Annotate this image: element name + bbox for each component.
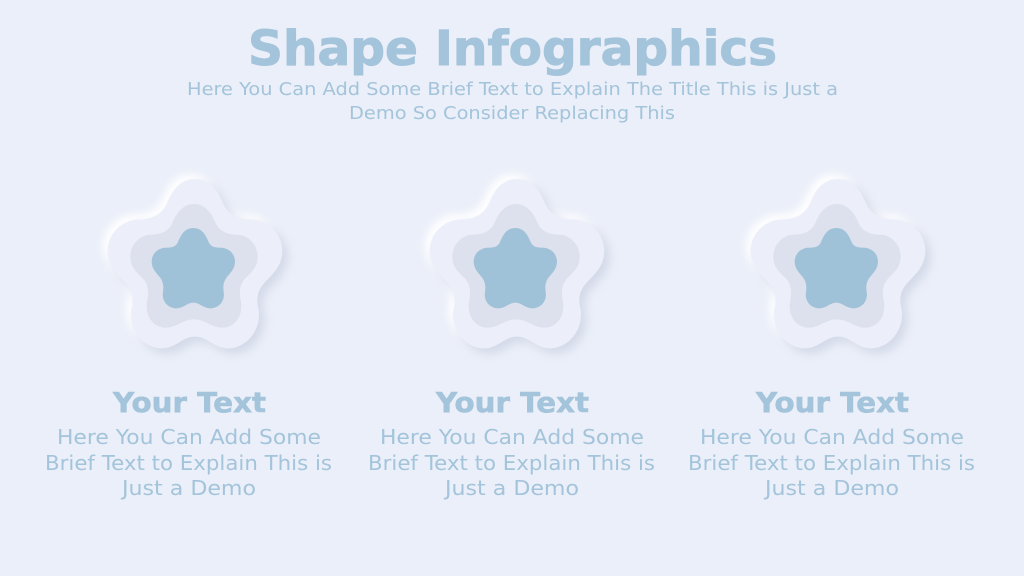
text block: card 2: Here You Can Add Some: [380, 425, 644, 449]
icon: layered star 1: [103, 174, 288, 354]
text block: card 1: Just a Demo: [120, 476, 256, 500]
text block: card 1: Here You Can Add Some: [57, 425, 321, 449]
icon: layered star 2: [425, 174, 610, 354]
panel: shape card 1: [45, 174, 332, 500]
text block: card 2: Brief Text to Explain This is: [368, 451, 655, 475]
text block: card 1: [45, 425, 332, 500]
subtitle text: Here You Can Add Some Brief Text to Explain The Title This is Just a: [187, 79, 838, 100]
subtitle text: Demo So Consider Replacing This: [349, 103, 675, 124]
text block: card 1: Brief Text to Explain This is: [45, 451, 332, 475]
subtitle text: [187, 79, 838, 124]
panel: shape card 2: [368, 174, 655, 500]
text block: card 3: [688, 425, 975, 500]
text block: card 2: [368, 425, 655, 500]
text block: card 3: Here You Can Add Some: [700, 425, 964, 449]
heading: card 3: Your Text: [755, 386, 909, 419]
icon: layered star 3: [746, 174, 931, 354]
text block: card 2: Just a Demo: [443, 476, 579, 500]
heading: card 1: Your Text: [112, 386, 266, 419]
text block: card 3: Brief Text to Explain This is: [688, 451, 975, 475]
panel: shape card 3: [688, 174, 975, 500]
title: Shape Infographics: [248, 21, 777, 77]
text block: card 3: Just a Demo: [763, 476, 899, 500]
heading: card 2: Your Text: [435, 386, 589, 419]
